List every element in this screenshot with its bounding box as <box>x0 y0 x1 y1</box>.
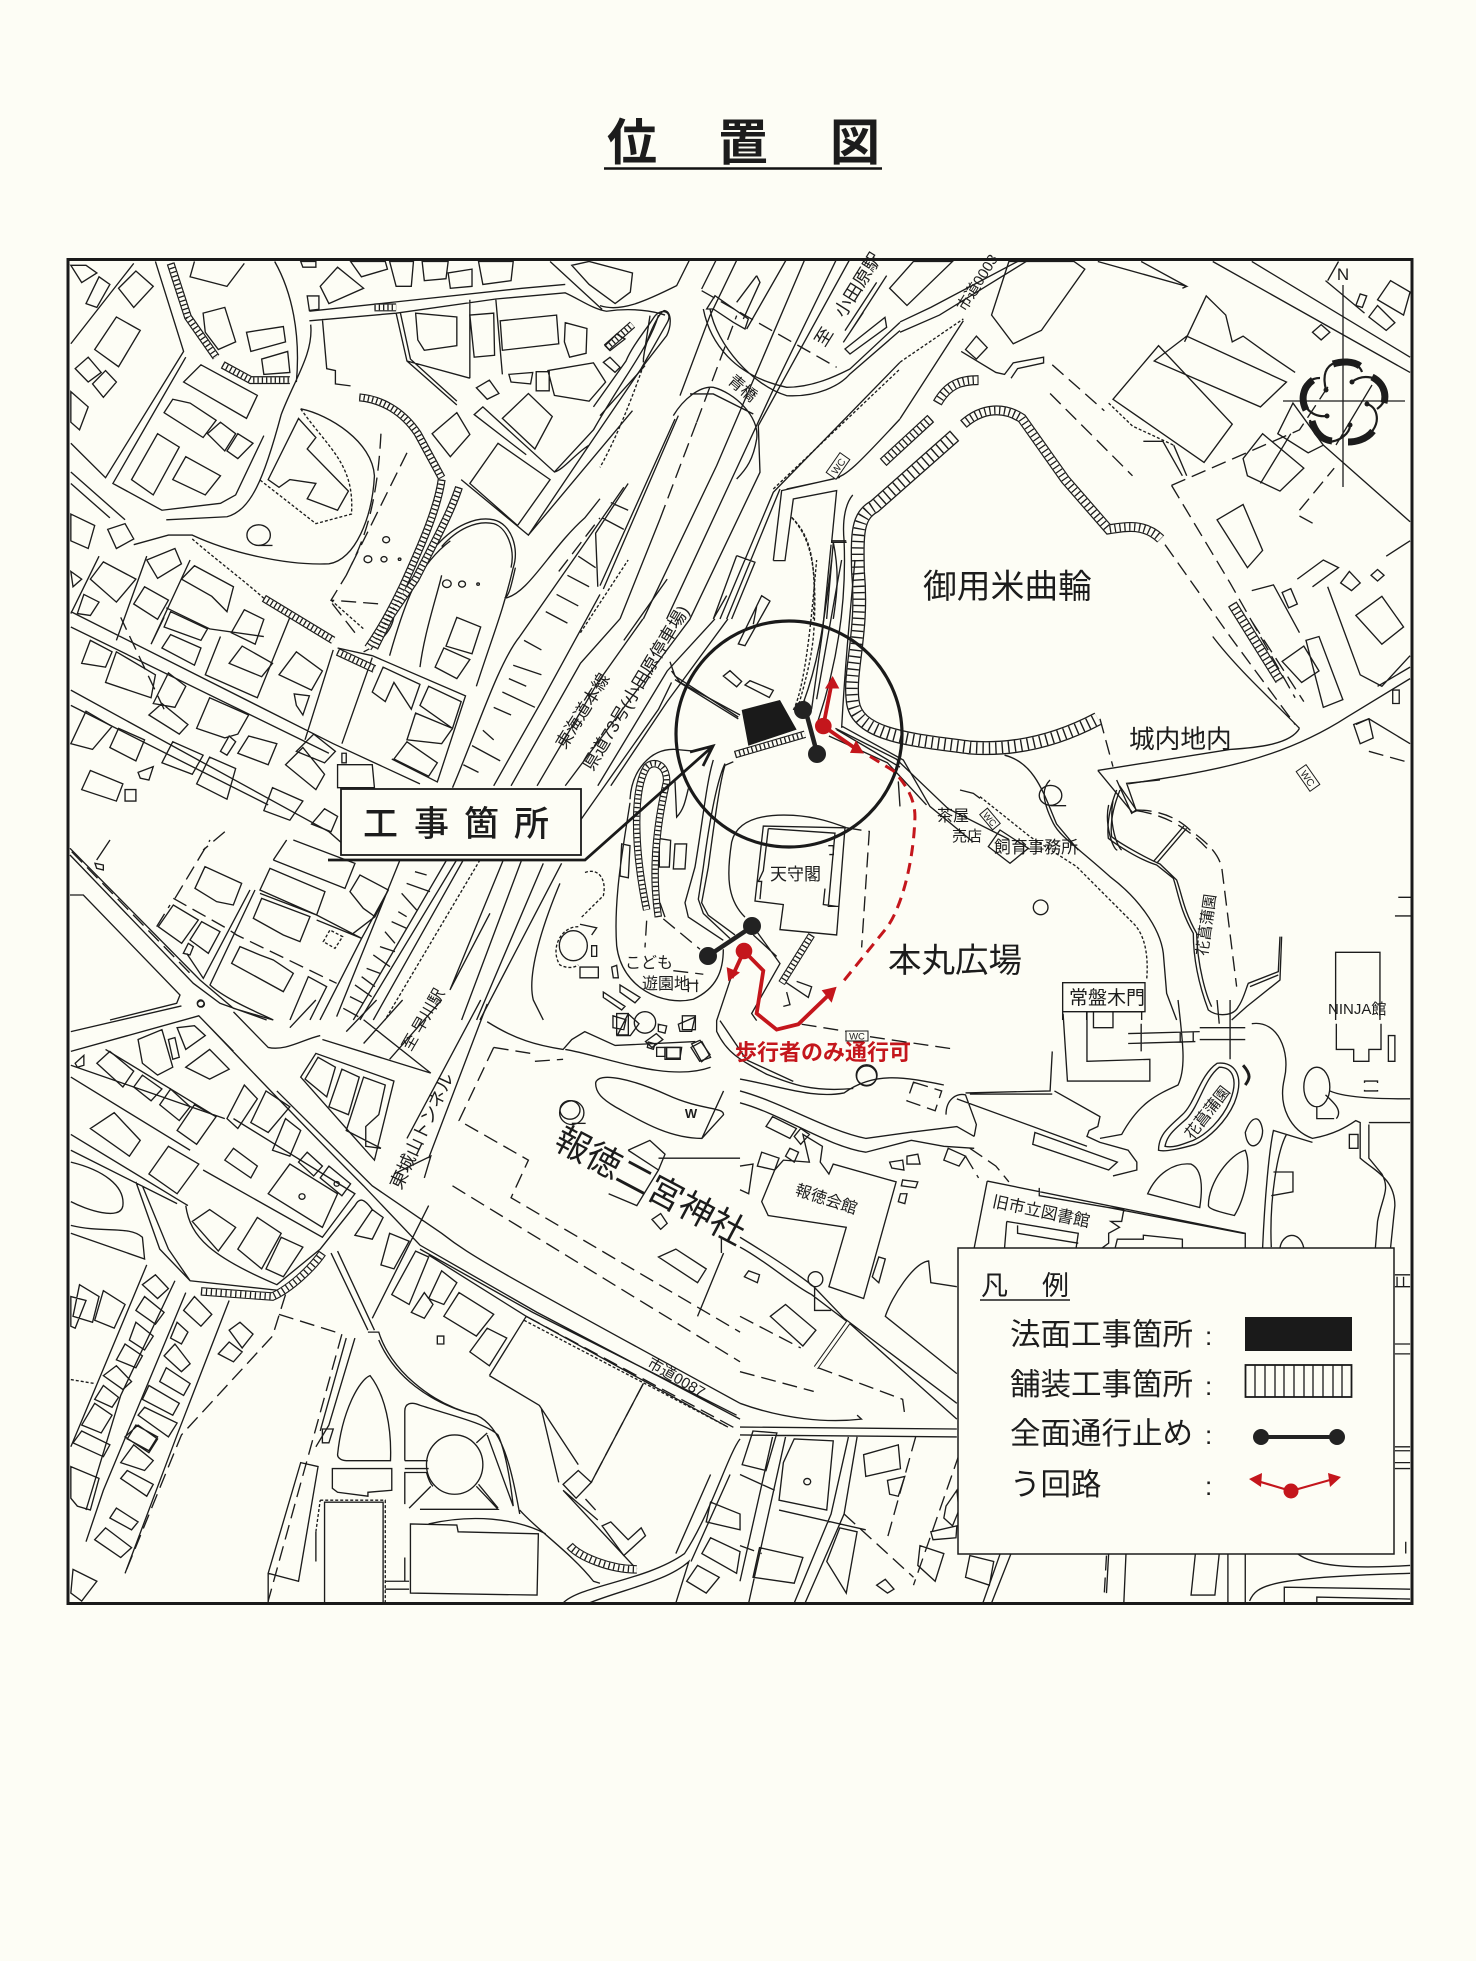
legend row: paving work <box>1010 1365 1352 1402</box>
map: castle keep and centre <box>559 560 973 1119</box>
label: 至: 至 <box>811 324 837 350</box>
legend row: detour <box>1010 1468 1341 1502</box>
legend heading <box>980 1271 1070 1301</box>
map: north-west quadrant streets and buildings <box>71 261 740 850</box>
WC markers: WC <box>1297 769 1316 789</box>
legend row: paving work: 舗装工事箇所 <box>1010 1368 1193 1402</box>
legend row: detour: : <box>1205 1471 1212 1501</box>
label: 花菖蒲園 north: 花菖蒲園 <box>1193 893 1220 957</box>
label: 旧市立図書館: 旧市立図書館 <box>991 1192 1091 1231</box>
WC markers <box>826 453 1320 1042</box>
callout: 工事箇所 label <box>328 746 713 860</box>
legend heading: 凡 <box>981 1271 1008 1301</box>
label: 本丸広場: 本丸広場 <box>888 943 1022 980</box>
label: 市道0003: 市道0003 <box>954 252 1002 314</box>
label: 常盤木門: 常盤木門 <box>1069 987 1145 1009</box>
label: 報徳会館: 報徳会館 <box>793 1181 859 1218</box>
label: 遊園地: 遊園地 <box>642 975 690 993</box>
legend row: full closure: 全面通行止め <box>1010 1417 1193 1451</box>
WC markers: WC <box>830 457 849 477</box>
label: 県道73号: 県道73号(小田原停車場) <box>579 602 693 774</box>
label: 売店: 売店 <box>952 828 982 845</box>
full road closure: north <box>794 701 826 762</box>
panel: legend <box>958 1248 1394 1554</box>
legend row: slope work: 法面工事箇所 <box>1010 1318 1193 1352</box>
legend row: slope work: : <box>1205 1321 1212 1351</box>
place names on the map <box>386 249 1386 1401</box>
label: 市道0087: 市道0087 <box>644 1355 708 1401</box>
label: 茶屋: 茶屋 <box>937 807 969 825</box>
WC markers: WC <box>981 810 999 829</box>
slope work site: black block <box>742 700 797 746</box>
WC markers: WC <box>849 1032 865 1042</box>
label: こども: こども <box>625 954 673 972</box>
label: 青橋: 青橋 <box>724 371 760 406</box>
label: 報徳二宮神社: 報徳二宮神社 <box>548 1119 752 1253</box>
label: 飼育事務所: 飼育事務所 <box>994 838 1078 857</box>
legend row: paving work: : <box>1205 1371 1212 1401</box>
map: south-east quadrant streets and buildings <box>740 1000 1410 1603</box>
label: 小田原駅: 小田原駅 <box>830 249 886 321</box>
label: NINJA館: NINJA館 <box>1328 1001 1386 1018</box>
map: western middle band <box>70 840 578 1020</box>
full road closure: south <box>700 918 760 964</box>
detour route in red <box>727 676 915 1030</box>
callout: 工事箇所 label: 工事箇所 <box>363 805 549 844</box>
label: 東海道本線: 東海道本線 <box>552 670 614 752</box>
label: pedestrians only: 歩行者のみ通行可 <box>735 1040 911 1065</box>
legend row: full closure <box>1010 1417 1345 1451</box>
north arrow and plum crest: N <box>1337 265 1349 284</box>
map: street base drawing <box>70 259 1412 1603</box>
label: well mark: W <box>685 1106 698 1121</box>
map: railway corridor near the bridge <box>600 259 900 619</box>
map: eastern middle band <box>960 780 1412 1020</box>
legend row: full closure: : <box>1205 1420 1212 1450</box>
legend row: slope work <box>1010 1317 1352 1352</box>
map: north-east quadrant streets and buildings <box>792 261 1410 850</box>
label: tunnel: 東城山トンネル <box>386 1070 458 1192</box>
legend heading: 例 <box>1042 1271 1069 1301</box>
map: south-west quadrant streets and buildings <box>71 1000 740 1603</box>
title: 位置図 <box>607 115 880 171</box>
label: 城内地内: 城内地内 <box>1129 725 1232 754</box>
north arrow and plum crest <box>1283 265 1405 487</box>
map frame <box>68 260 1412 1604</box>
label: 御用米曲輪: 御用米曲輪 <box>923 568 1092 606</box>
label: 花菖蒲園 south: 花菖蒲園 <box>1181 1083 1234 1143</box>
label: 至 早川駅: 至 早川駅 <box>400 986 448 1054</box>
label: 天守閣: 天守閣 <box>770 865 821 884</box>
legend row: detour: う回路 <box>1010 1468 1102 1502</box>
circle: construction site marker <box>676 621 902 847</box>
